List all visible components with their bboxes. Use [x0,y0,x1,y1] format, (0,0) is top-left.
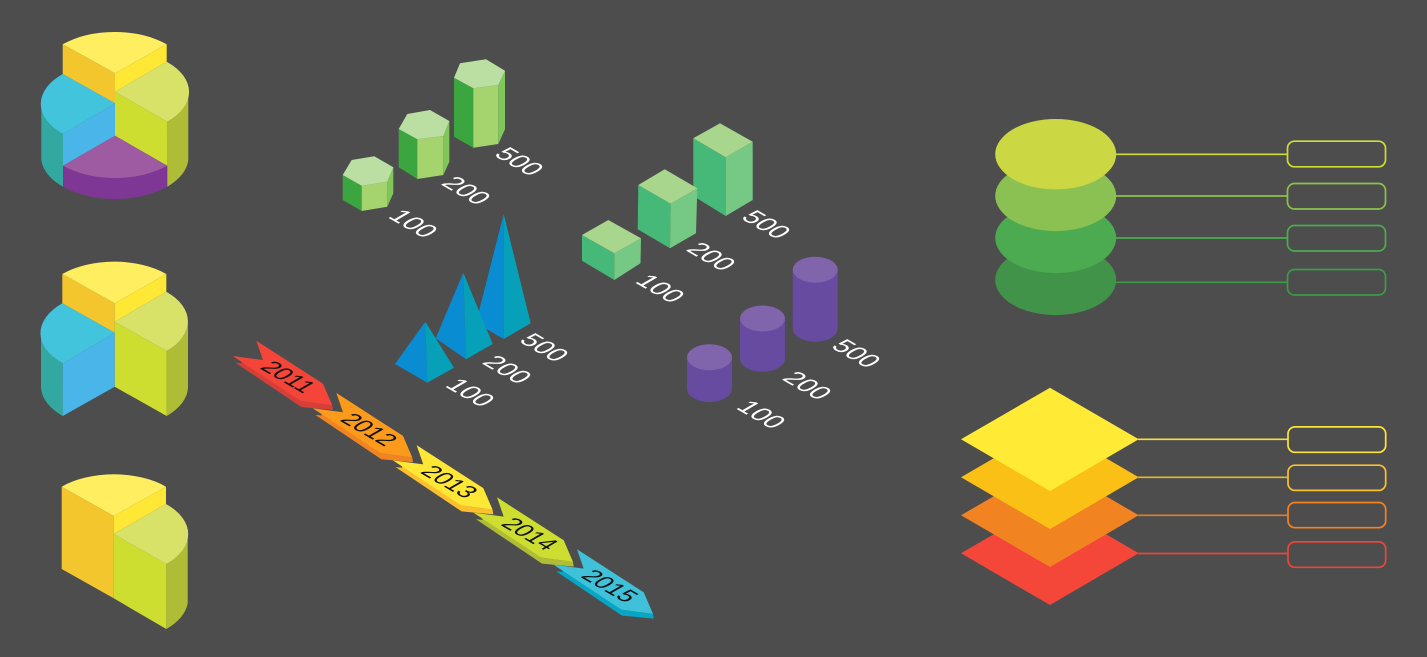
disc layer 3 [995,203,1386,273]
cylinder 500: 500 [825,335,888,372]
hex column 200 [399,110,498,209]
pyramid 100 [395,322,502,411]
hex column 500: 500 [488,143,551,180]
hex column 200: 200 [435,172,498,209]
lime slice [114,504,188,629]
cube column 200 [638,169,743,275]
yellow slice [62,474,166,598]
pyramid 200: 200 [476,351,539,388]
yellow raised slice [62,262,166,333]
stacked diamonds with callouts [961,388,1386,605]
pie chart: two slices [62,474,188,629]
disc layer 1 [995,119,1386,189]
arrow 2011 [233,341,333,410]
timeline ribbon 2011-2015 [233,341,654,619]
diamond layer 1 [961,388,1386,491]
arrow 2012: 2012 [334,410,403,450]
cylinder 200: 200 [776,367,839,404]
diamond layer 2 [961,426,1386,529]
cube column 200: 200 [680,238,743,275]
pyramid 100: 100 [439,374,502,411]
disc layer 2 [995,161,1386,231]
arrow 2013: 2013 [414,462,484,502]
purple slice [63,136,167,199]
cylinder 100 [687,344,793,433]
blue slice [40,303,115,416]
blue slice [41,74,115,187]
hex column 500 [454,59,551,180]
pyramid chart [395,214,576,411]
stacked discs with callouts [995,119,1386,315]
hex column 100: 100 [382,205,445,242]
arrow 2013 [393,445,493,514]
lime slice [115,292,188,416]
cube column chart [582,123,798,307]
diamond layer 4 [961,502,1386,605]
cube column 100 [582,220,692,307]
arrow 2012 [313,393,413,462]
pyramid 200 [436,273,539,388]
pie chart: three slices [40,262,188,416]
cylinder 100: 100 [730,396,793,433]
cube column 100: 100 [629,270,692,307]
arrow 2015 [553,549,654,619]
cylinder 500 [793,257,888,372]
arrow 2015: 2015 [575,566,644,606]
arrow 2011: 2011 [254,357,322,397]
hexagonal column chart [343,59,551,242]
pyramid 500: 500 [513,329,576,366]
pie chart: five-piece top, full pie [41,32,189,199]
hex column 100 [343,156,445,242]
cube column 500 [693,123,798,243]
lime slice [115,62,189,187]
cylinder 200 [740,306,839,404]
cylinder chart [687,257,888,433]
cube column 500: 500 [735,206,798,243]
diamond layer 3 [961,464,1386,567]
arrow 2014: 2014 [495,514,564,554]
yellow raised slice [63,32,167,103]
pyramid 500 [476,214,576,366]
disc layer 4 [995,245,1386,315]
arrow 2014 [473,497,574,567]
